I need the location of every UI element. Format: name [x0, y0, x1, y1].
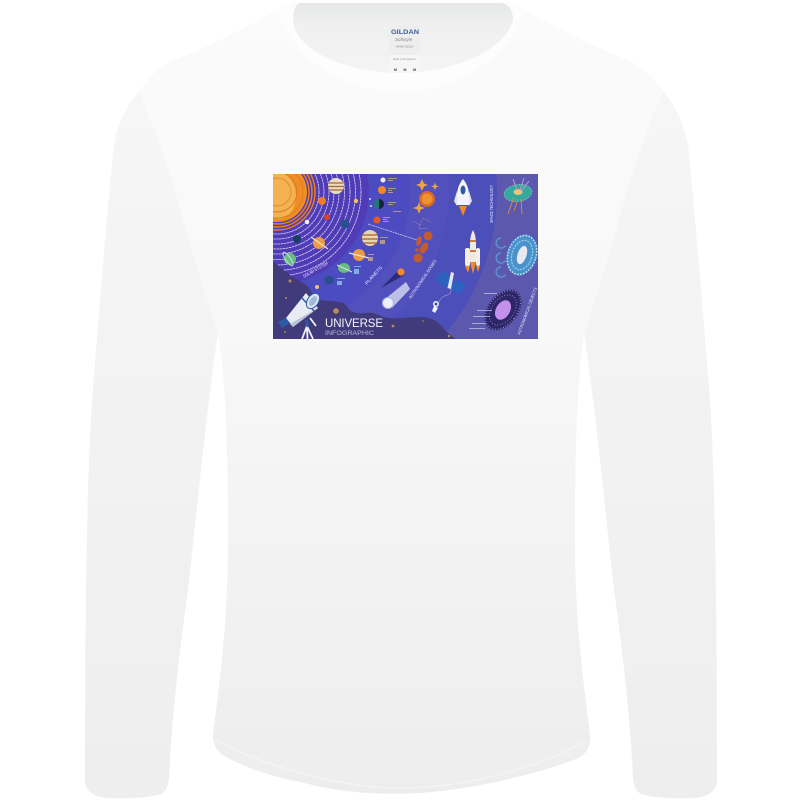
inner neck	[293, 3, 513, 73]
satellite	[435, 271, 466, 294]
planet: neptune	[324, 276, 334, 284]
planet: green ringed	[282, 252, 296, 266]
neck label	[389, 25, 420, 72]
shirt body	[140, 0, 662, 794]
planet: blue	[340, 220, 350, 228]
neck label: Softstyle	[395, 37, 413, 42]
tripod	[302, 326, 313, 339]
planet: mars	[374, 216, 380, 224]
heading: space technology: SPACE TECHNOLOGY	[489, 185, 494, 223]
nebula galaxy	[477, 283, 529, 337]
small captions	[368, 178, 401, 261]
constellation	[413, 218, 431, 229]
stars on landscape	[284, 280, 450, 337]
band: astronomical bodies	[394, 174, 497, 332]
printed infographic	[273, 174, 538, 339]
hem stitching	[216, 740, 588, 788]
planet: white	[305, 220, 309, 224]
band: planets	[144, 59, 410, 325]
heading: planets: PLANETS	[364, 265, 383, 286]
t-shirt	[85, 0, 717, 798]
brand: GILDAN	[391, 29, 419, 36]
wormhole	[503, 178, 533, 214]
gauge 1	[496, 238, 506, 248]
star cluster	[413, 179, 439, 214]
inner planets list	[315, 178, 401, 289]
comet: orange	[381, 268, 405, 288]
gauge 2	[496, 253, 506, 263]
planet: earth	[293, 235, 301, 243]
right sleeve seam	[584, 92, 662, 333]
rocket: launcher	[465, 230, 480, 274]
gauges	[496, 238, 506, 277]
planet: orange	[318, 197, 326, 205]
sun	[273, 174, 316, 231]
planet: jupiter	[328, 178, 344, 194]
rocket: shuttle	[454, 179, 472, 216]
planet: earth with moons	[369, 198, 384, 209]
subtitle: INFOGRAPHIC	[325, 330, 374, 337]
planet: saturn ringed	[349, 249, 369, 261]
planet: red	[324, 214, 330, 220]
asteroids	[414, 232, 432, 262]
star lower	[413, 202, 425, 214]
planet: saturn	[311, 237, 328, 249]
heading: astronomical bodies: ASTRONOMICAL BODIES	[408, 258, 438, 300]
planet: striped jupiter	[362, 230, 378, 246]
collar rib	[278, 0, 524, 92]
star small	[431, 182, 439, 190]
t-shirt product scene	[85, 3, 717, 798]
left sleeve seam	[140, 92, 218, 333]
planet: venus	[378, 186, 386, 194]
neck label: M M M	[394, 68, 416, 72]
dashed divider line	[368, 224, 417, 240]
band: solar system	[273, 174, 369, 281]
planet: mercury	[380, 178, 386, 182]
orbits	[273, 174, 362, 276]
astronaut	[432, 289, 451, 313]
planets of the solar system	[281, 178, 358, 267]
comet: white	[382, 282, 410, 308]
band: planets outer	[105, 20, 449, 364]
right sleeve	[562, 85, 717, 798]
planet: uranus ringed	[337, 263, 352, 273]
neck label: 64400 32114	[396, 44, 414, 48]
nebula captions	[469, 293, 497, 329]
eyepiece	[278, 318, 290, 328]
neck label: Made in Bangladesh	[393, 58, 416, 61]
heading: astronomical objects: ASTRONOMICAL OBJECTS	[516, 286, 538, 335]
spiral galaxy	[501, 230, 543, 280]
sun star	[419, 191, 435, 207]
outer background band	[446, 174, 538, 339]
gauge 3	[496, 267, 506, 277]
heading: solar system: SOLAR SYSTEM	[302, 260, 329, 279]
telescope	[278, 291, 322, 339]
left sleeve	[85, 85, 240, 798]
planet: yellow small	[354, 199, 358, 203]
title: UNIVERSE	[325, 318, 383, 330]
dark lower landscape	[273, 262, 456, 339]
planet: pluto	[315, 285, 319, 289]
star large	[416, 179, 428, 191]
tube	[286, 293, 318, 327]
